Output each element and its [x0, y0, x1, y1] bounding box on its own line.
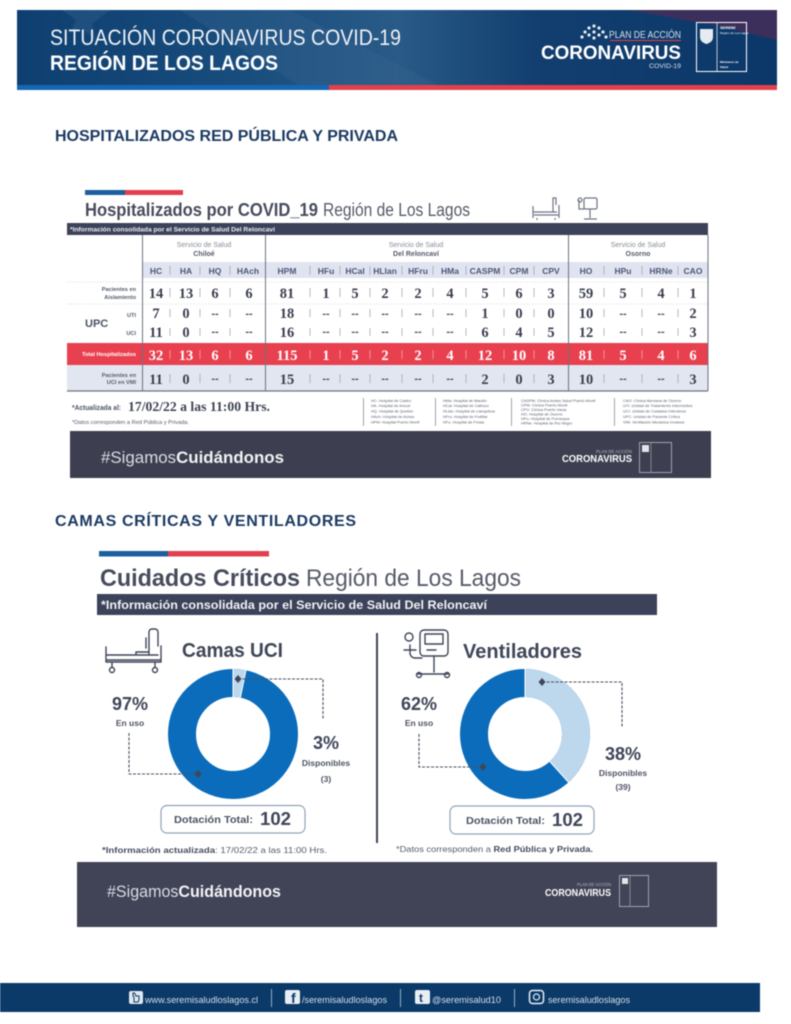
row: pacientes en UCI en VMI: 2: [481, 372, 489, 388]
row: UCI: 5: [547, 325, 555, 341]
row: UCI: 11: [149, 325, 163, 341]
column header band: HA: [180, 266, 192, 276]
dotación total box: [161, 806, 305, 833]
row: UCI: 3: [689, 325, 697, 341]
critical info bar: *Información consolidada por el Servicio de Salud Del Reloncaví: [101, 600, 488, 612]
row: UTI: --: [322, 308, 330, 320]
row: pacientes en aislamiento: 14: [149, 286, 163, 302]
column header band: HCal: [345, 266, 365, 276]
service headers: Osorno: [626, 251, 650, 258]
row: pacientes en UCI en VMI: [149, 372, 697, 388]
glossary: UCI- Unidad de Cuidados Intensivos: [623, 408, 686, 414]
icon: ventilator: [404, 630, 450, 678]
stat: 38% disponibles: Disponibles: [599, 768, 647, 778]
glossary: UPC- Unidad de Paciente Crítica: [623, 414, 681, 419]
row: UTI: 0: [515, 306, 523, 322]
row labels: UTI: [127, 313, 136, 319]
camas UCI column: [102, 629, 350, 855]
column header band: HPu: [614, 266, 632, 276]
row: UTI: 0: [182, 306, 190, 322]
table title: Hospitalizados por COVID_19: [85, 200, 318, 220]
leader: disponibles: [234, 675, 323, 720]
footer: website: www.seremisaludloslagos.cl: [144, 995, 258, 1005]
glossary: HFu- Hospital de Fresia: [443, 420, 485, 424]
logo: seremi ministerio de salud: Región de Los Lagos: [720, 31, 749, 35]
row labels: UCI: [126, 331, 136, 337]
row: pacientes en UCI en VMI: --: [245, 373, 253, 385]
row: UCI: --: [322, 326, 330, 338]
glossary: HQ- Hospital de Quellón: [371, 408, 413, 414]
row: UTI: 2: [689, 306, 697, 322]
row labels: Aislamiento: [104, 295, 137, 301]
row: pacientes en aislamiento: 4: [657, 286, 665, 302]
footer: instagram: seremisaludloslagos: [548, 995, 630, 1005]
glossary: HFru- Hospital de Frutillar: [443, 414, 488, 419]
stat: 62% en uso: [401, 694, 437, 728]
vmi band: [67, 365, 708, 391]
row: UTI: --: [211, 308, 219, 320]
banner: sigamos cuidándonos: [77, 862, 717, 927]
row: UCI: 0: [182, 325, 190, 341]
row: total hospitalizados: 5: [619, 348, 627, 364]
section heading: hospitalizados: HOSPITALIZADOS RED PÚBLICA Y PRIVADA: [55, 126, 398, 145]
row: UTI: --: [381, 308, 389, 320]
row: UTI: [152, 306, 697, 322]
row: total hospitalizados: 13: [179, 348, 193, 364]
footer: facebook: /seremisaludloslagos: [302, 995, 387, 1005]
section heading: camas críticas: CAMAS CRÍTICAS Y VENTILADORES: [55, 511, 356, 530]
row: pacientes en aislamiento: 5: [619, 286, 627, 302]
critical accent stripe: [99, 551, 269, 556]
row: pacientes en aislamiento: 1: [322, 286, 330, 302]
column header band: HC: [150, 266, 162, 276]
logo: plan de acción coronavirus: CORONAVIRUS: [541, 43, 681, 64]
update note: *Información actualizada : 17/02/22 a las 11:00 Hrs.: [102, 845, 327, 855]
stat: 3% disponibles: 3%: [313, 733, 339, 753]
banner: sigamos cuidándonos: PLAN DE ACCIÓN: [577, 881, 611, 887]
row: total hospitalizados: 6: [211, 348, 219, 364]
glossary: HMa- Hospital de Maullín: [443, 398, 487, 403]
critical title: Cuidados Críticos: [100, 565, 300, 592]
banner: sigamos cuidándonos: CORONAVIRUS: [562, 453, 632, 465]
update note: *Datos corresponden a Red Pública y Privada.: [72, 420, 189, 426]
row labels: [82, 287, 137, 386]
footer: website: [129, 991, 258, 1005]
logo: plan de acción coronavirus: [541, 24, 681, 70]
glossary: HC- Hospital de Castro: [371, 398, 411, 403]
table info bar: [67, 223, 708, 235]
glossary: [364, 398, 692, 426]
header banner: [17, 10, 777, 90]
data note: *Datos corresponden a Red Pública y Privada.: [396, 844, 593, 854]
glossary: CPM- Clínica Puerto Montt: [521, 402, 568, 408]
glossary: HPu- Hospital de Purranque: [521, 416, 570, 421]
table title: [85, 200, 470, 220]
banner: sigamos cuidándonos: CORONAVIRUS: [545, 888, 611, 899]
stat: 38% disponibles: [599, 744, 647, 792]
row: UCI: 4: [515, 325, 523, 341]
banner: sigamos cuidándonos: #SigamosCuidándonos: [107, 882, 281, 901]
column header band: HO: [580, 266, 593, 276]
service headers: Servicio de Salud: [611, 242, 665, 249]
logo: seremi ministerio de salud: [696, 22, 749, 72]
row: total hospitalizados: 5: [351, 348, 359, 364]
footer: facebook: [285, 990, 387, 1006]
row: total hospitalizados: 4: [446, 348, 454, 364]
row: UCI: 16: [280, 325, 294, 341]
stat: 97% en uso: En uso: [116, 718, 144, 728]
row: pacientes en aislamiento: 1: [689, 286, 697, 302]
banner: sigamos cuidándonos: [70, 431, 711, 478]
ventiladores heading: Ventiladores: [463, 641, 582, 663]
row labels: UPC: [85, 318, 108, 330]
row: total hospitalizados: 10: [512, 348, 526, 364]
row: pacientes en UCI en VMI: --: [414, 373, 422, 385]
critical info bar: [97, 594, 657, 615]
table info bar: *Información consolidada por el Servicio de Salud Del Reloncaví: [70, 228, 275, 234]
row: UCI: 12: [579, 325, 593, 341]
icon: bed small: [533, 198, 559, 220]
column header band: HLlan: [373, 266, 397, 276]
dotación total box: 102: [260, 809, 291, 829]
column header band: HMa: [441, 266, 459, 276]
ventiladores column: [396, 630, 647, 854]
row: pacientes en UCI en VMI: --: [211, 373, 219, 385]
row: UTI: 1: [481, 306, 489, 322]
row: pacientes en UCI en VMI: 11: [149, 372, 163, 388]
row labels: Pacientes en: [102, 287, 137, 293]
column header band: HRNe: [649, 266, 673, 276]
critical title: Región de Los Lagos: [306, 565, 521, 592]
column header band: CASPM: [470, 266, 500, 276]
service headers: Del Reloncaví: [393, 251, 440, 258]
row: total hospitalizados: 4: [657, 348, 665, 364]
stat: 3% disponibles: Disponibles: [302, 758, 350, 768]
row: pacientes en aislamiento: 6: [211, 286, 219, 302]
footer bar: [0, 983, 760, 1012]
divider: [376, 633, 378, 843]
row: pacientes en UCI en VMI: 3: [547, 372, 555, 388]
table accent stripe: [85, 190, 183, 195]
service headers: [177, 242, 665, 258]
stat: 38% disponibles: 38%: [605, 744, 641, 764]
row: pacientes en aislamiento: 6: [515, 286, 523, 302]
stat: 62% en uso: 62%: [401, 694, 437, 714]
row: pacientes en UCI en VMI: 10: [579, 372, 593, 388]
glossary: HAch- Hospital de Achao: [371, 414, 414, 419]
row: pacientes en UCI en VMI: 0: [182, 372, 190, 388]
glossary: HLlan- Hospital de Llanquihue: [443, 408, 495, 414]
row: UCI: --: [414, 326, 422, 338]
row: UTI: --: [351, 308, 359, 320]
row: pacientes en UCI en VMI: --: [446, 373, 454, 385]
row: pacientes en aislamiento: 59: [579, 286, 593, 302]
row: pacientes en aislamiento: 13: [179, 286, 193, 302]
row: UTI: --: [414, 308, 422, 320]
row: UTI: 7: [152, 306, 160, 322]
glossary: HPM- Hospital Puerto Montt: [371, 420, 420, 424]
row: pacientes en UCI en VMI: 15: [280, 372, 294, 388]
donut chart: ventiladores: [474, 669, 576, 785]
row: total hospitalizados: 2: [414, 348, 422, 364]
update note: [72, 399, 270, 426]
row: UCI: --: [381, 326, 389, 338]
row: pacientes en UCI en VMI: --: [351, 373, 359, 385]
donut chart: camas UCI: [182, 669, 284, 785]
leader: en uso: [129, 733, 202, 778]
row: UTI: --: [619, 308, 627, 320]
row: total hospitalizados: 12: [478, 348, 492, 364]
row: total hospitalizados: [149, 348, 697, 364]
column header band: [142, 262, 708, 278]
column header band: HFru: [408, 266, 428, 276]
footer: twitter: @seremisalud10: [432, 995, 501, 1005]
row: total hospitalizados: 6: [245, 348, 253, 364]
row: UCI: --: [245, 326, 253, 338]
column header band: HPM: [278, 266, 296, 276]
critical title: [100, 565, 521, 592]
row: total hospitalizados: 81: [579, 348, 593, 364]
row: pacientes en UCI en VMI: --: [619, 373, 627, 385]
stat: 97% en uso: [112, 694, 148, 728]
icon: hospital bed: [106, 629, 161, 672]
header title: [50, 25, 401, 75]
row labels: UCI en VMI: [107, 380, 136, 386]
footer: facebook: f: [291, 990, 296, 1006]
header title: REGIÓN DE LOS LAGOS: [50, 51, 278, 75]
glossary: VMI- Ventilación Mecánica Invasiva: [623, 420, 685, 424]
logo: seremi ministerio de salud: Ministerio de: [720, 60, 739, 64]
row: pacientes en aislamiento: [149, 286, 697, 302]
footer: twitter: t: [419, 991, 423, 1005]
logo: seremi ministerio de salud: Salud: [720, 65, 728, 69]
row: pacientes en UCI en VMI: 3: [689, 372, 697, 388]
service headers: Chiloé: [193, 251, 215, 258]
table title: Región de Los Lagos: [323, 200, 470, 220]
row labels: Pacientes en: [102, 373, 137, 379]
footer: twitter: [415, 990, 501, 1005]
column header band: HFu: [318, 266, 334, 276]
leader: disponibles: [538, 678, 622, 727]
service headers: Servicio de Salud: [177, 242, 231, 249]
hospitalizados table panel: [67, 190, 711, 478]
row: total hospitalizados: 115: [277, 348, 297, 364]
row: total hospitalizados: 32: [149, 348, 163, 364]
row: total hospitalizados: 6: [689, 348, 697, 364]
column header band: CPV: [542, 266, 560, 276]
row: UTI: --: [657, 308, 665, 320]
glossary: CPV- Clínica Puerto Varas: [521, 407, 567, 412]
stat: 3% disponibles: (3): [321, 774, 331, 784]
stat: 97% en uso: 97%: [112, 694, 148, 714]
column header band: CAO: [684, 266, 703, 276]
row: pacientes en aislamiento: 2: [414, 286, 422, 302]
row: total hospitalizados: 1: [322, 348, 330, 364]
camas UCI heading: Camas UCI: [182, 640, 283, 662]
row: UCI: --: [619, 326, 627, 338]
row: total hospitalizados: 2: [381, 348, 389, 364]
logo: plan de acción coronavirus: COVID-19: [649, 63, 681, 70]
glossary: CAO- Clínica Alemana de Osorno: [623, 398, 681, 403]
row: pacientes en aislamiento: 2: [381, 286, 389, 302]
dotación total box: Dotación Total:: [174, 814, 253, 826]
column header band: HQ: [209, 266, 222, 276]
glossary: CASPM- Clínica Andes Salud Puerto Montt: [521, 398, 596, 403]
stat: 38% disponibles: (39): [615, 782, 631, 792]
banner: sigamos cuidándonos: PLAN DE ACCIÓN: [596, 448, 632, 454]
leader: en uso: [419, 734, 486, 771]
footer: instagram: [530, 990, 630, 1005]
row: pacientes en UCI en VMI: --: [657, 373, 665, 385]
row: pacientes en UCI en VMI: --: [322, 373, 330, 385]
column header band: HAch: [237, 266, 259, 276]
row: pacientes en UCI en VMI: --: [381, 373, 389, 385]
row: UTI: --: [446, 308, 454, 320]
icon: ventilator small: [578, 198, 597, 219]
logo: seremi ministerio de salud: SEREMI: [720, 25, 735, 30]
row: UCI: --: [211, 326, 219, 338]
row: UCI: [149, 325, 697, 341]
logo: plan de acción coronavirus: PLAN DE ACCIÓN: [609, 28, 681, 41]
row: pacientes en aislamiento: 5: [481, 286, 489, 302]
row: pacientes en UCI en VMI: 0: [515, 372, 523, 388]
header title: SITUACIÓN CORONAVIRUS COVID-19: [50, 25, 401, 50]
header accent stripe: [17, 85, 777, 90]
update note: 17/02/22 a las 11:00 Hrs.: [128, 399, 270, 414]
glossary: HCal- Hospital de Calbuco: [443, 403, 489, 408]
glossary: UTI- Unidad de Tratamiento Intermedios: [623, 403, 692, 408]
row: UTI: --: [245, 308, 253, 320]
glossary: HA- Hospital de Ancud: [371, 403, 410, 408]
stat: 3% disponibles: [302, 733, 350, 784]
row: UTI: 10: [579, 306, 593, 322]
row: UCI: 6: [481, 325, 489, 341]
dotación total box: 102: [552, 810, 583, 830]
row labels: Total Hospitalizados: [82, 352, 136, 358]
row: pacientes en aislamiento: 5: [351, 286, 359, 302]
dotación total box: [450, 806, 594, 834]
row: pacientes en aislamiento: 81: [280, 286, 294, 302]
service headers: Servicio de Salud: [389, 242, 443, 249]
glossary: HO- Hospital de Osorno: [521, 412, 563, 416]
row: pacientes en aislamiento: 4: [446, 286, 454, 302]
total band: [67, 343, 708, 365]
dotación total box: Dotación Total:: [466, 815, 545, 827]
row: UCI: --: [351, 326, 359, 338]
row: UCI: --: [446, 326, 454, 338]
stat: 62% en uso: En uso: [405, 718, 433, 728]
row: pacientes en aislamiento: 6: [245, 286, 253, 302]
column header band: CPM: [510, 266, 528, 276]
row: total hospitalizados: 8: [547, 348, 555, 364]
row: UTI: 18: [280, 306, 294, 322]
glossary: HRNe- Hospital de Río Negro: [521, 420, 572, 426]
update note: *Actualizada al:: [72, 405, 121, 412]
row: pacientes en aislamiento: 3: [547, 286, 555, 302]
banner: sigamos cuidándonos: #SigamosCuidándonos: [101, 448, 284, 467]
cuidados críticos panel: [77, 551, 717, 927]
row: UCI: --: [657, 326, 665, 338]
row: UTI: 0: [547, 306, 555, 322]
